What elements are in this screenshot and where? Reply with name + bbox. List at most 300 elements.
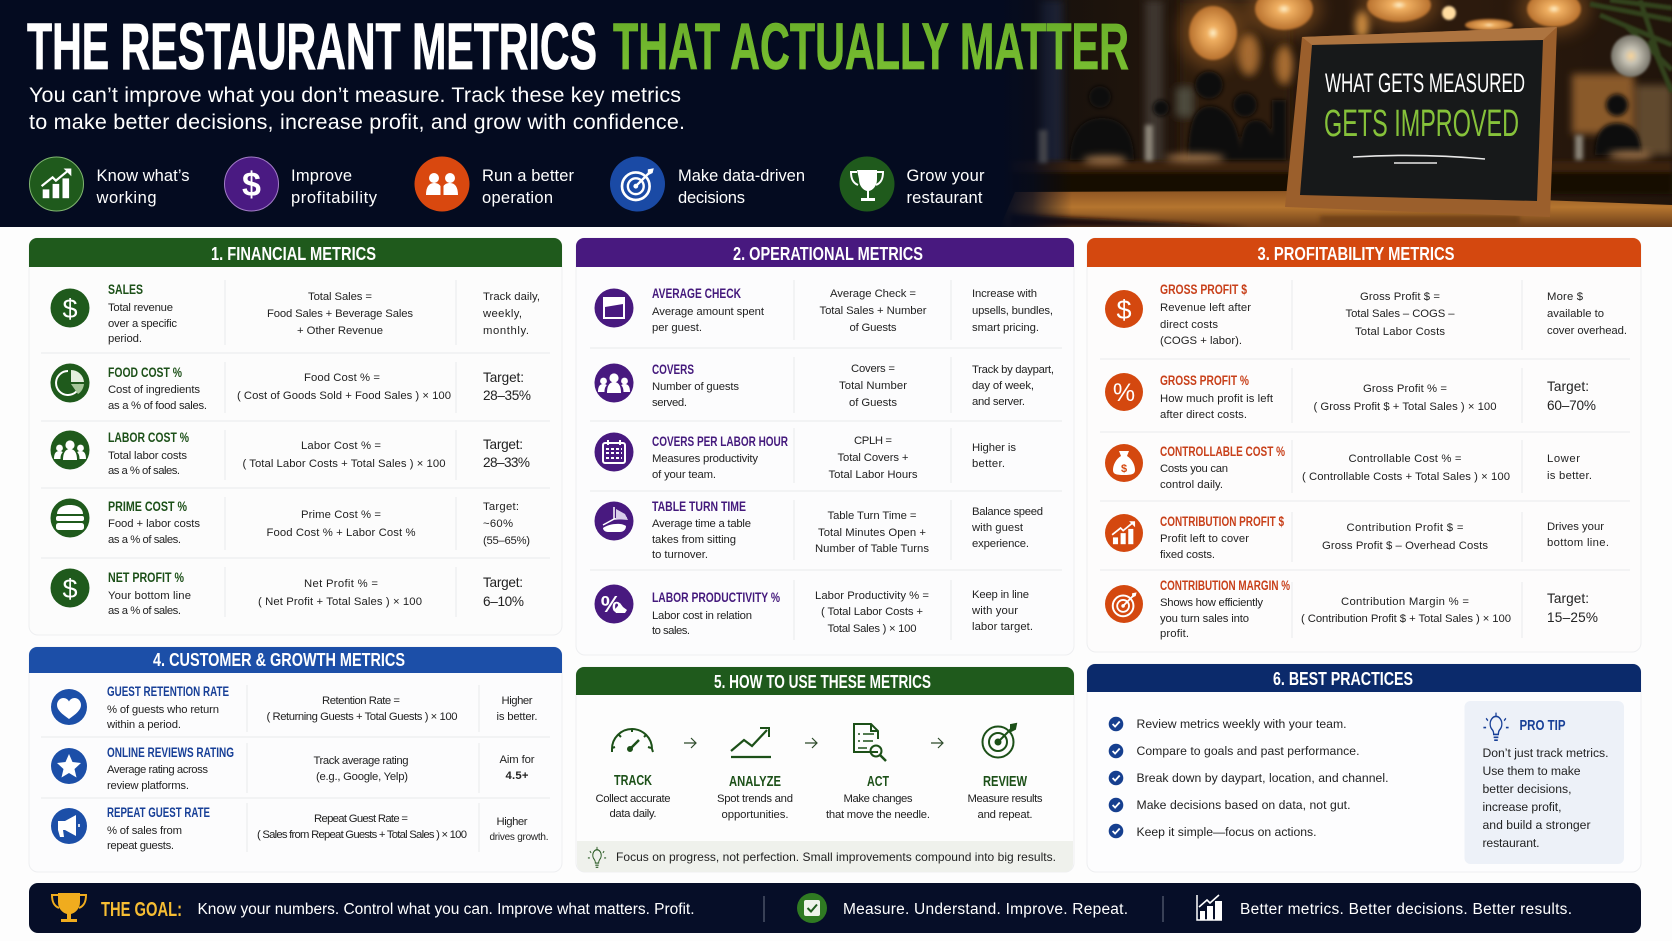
- pro tip text: Use them to make: [1482, 764, 1581, 778]
- navy background: [0, 0, 1000, 227]
- covers definition: served.: [652, 397, 687, 409]
- icon: trend line: [731, 728, 771, 757]
- heading: how to use these metrics: 5. HOW TO USE THESE METRICS: [714, 671, 931, 692]
- average check guidance: upsells, bundles,: [972, 305, 1053, 317]
- counter: [1010, 161, 1672, 194]
- prime cost definition: [108, 499, 200, 546]
- guest retention formula: Retention Rate =: [322, 695, 400, 707]
- covers guidance: day of week,: [972, 380, 1034, 392]
- arrow: [805, 738, 817, 748]
- heading: financial metrics: [29, 238, 562, 267]
- covers guidance: [972, 364, 1054, 408]
- sales formula: [267, 291, 413, 337]
- metric: sales: [50, 282, 540, 345]
- benefit: know what's working: Know what’s: [96, 167, 190, 185]
- prime cost definition: PRIME COST %: [108, 499, 187, 514]
- labor cost formula: Labor Cost % =: [301, 440, 381, 452]
- contribution profit guidance: [1547, 521, 1609, 549]
- table turn time formula: [815, 510, 929, 555]
- contribution margin target: Target:: [1547, 591, 1589, 606]
- benefit: run a better operation: Run a better: [482, 167, 574, 185]
- icon: dollar: [50, 288, 90, 328]
- food cost definition: [108, 365, 207, 412]
- gross profit dollars definition: (COGS + labor).: [1160, 335, 1242, 347]
- repeat guest guidance: Higher: [496, 816, 528, 828]
- food cost formula: ( Cost of Goods Sold + Food Sales ) × 100: [237, 390, 451, 402]
- panel 1: financial metrics: [29, 238, 562, 635]
- track label: TRACK: [614, 773, 652, 789]
- average check guidance: [972, 288, 1053, 334]
- labor productivity definition: [652, 590, 780, 637]
- lamp glow: [1179, 0, 1590, 69]
- covers formula: of Guests: [849, 397, 897, 409]
- table turn time definition: to turnover.: [652, 549, 708, 561]
- contribution profit definition: fixed costs.: [1160, 549, 1215, 561]
- metric: average check: [594, 286, 1053, 334]
- benefit: grow your restaurant: Grow your: [906, 167, 985, 185]
- controllable cost definition: control daily.: [1160, 479, 1223, 491]
- pro tip text: and build a stronger: [1482, 818, 1590, 832]
- sales formula: + Other Revenue: [297, 325, 383, 337]
- benefit: grow your restaurant: restaurant: [906, 189, 983, 207]
- net profit formula: ( Net Profit + Total Sales ) × 100: [258, 596, 422, 608]
- labor productivity formula: Labor Productivity % =: [815, 590, 929, 602]
- checklist: Break down by daypart, location, and channel.: [1136, 771, 1388, 785]
- icon: dollar: $: [62, 294, 78, 324]
- labor productivity guidance: Keep in line: [972, 589, 1029, 601]
- gross profit percent target: 60–70%: [1547, 398, 1596, 413]
- prime cost target: [483, 501, 530, 547]
- icon: target: [982, 724, 1016, 758]
- arrow: [931, 738, 943, 748]
- step: review: [968, 724, 1043, 821]
- table turn time formula: Table Turn Time =: [828, 510, 917, 522]
- heading: best practices: [1087, 664, 1641, 692]
- review label: Measure results: [968, 793, 1043, 805]
- icon: percent person: %: [601, 591, 621, 617]
- hero banner: [0, 0, 1672, 227]
- labor productivity definition: to sales.: [652, 625, 690, 637]
- contribution profit definition: Profit left to cover: [1160, 533, 1249, 545]
- better slogan: Better metrics. Better decisions. Better results.: [1240, 901, 1572, 918]
- gross profit percent definition: after direct costs.: [1160, 409, 1247, 421]
- benefit: run a better operation: [414, 156, 574, 212]
- table turn time definition: TABLE TURN TIME: [652, 499, 746, 514]
- metric: net profit: [50, 568, 524, 617]
- sales definition: SALES: [108, 282, 143, 297]
- covers formula: Covers =: [851, 363, 895, 375]
- net profit definition: NET PROFIT %: [108, 570, 184, 585]
- icon: calendar: [594, 432, 634, 472]
- average check formula: of Guests: [850, 322, 897, 334]
- gross profit dollars formula: [1346, 291, 1455, 338]
- labor cost formula: ( Total Labor Costs + Total Sales ) × 100: [242, 458, 446, 470]
- icon: pie chart: [50, 364, 90, 402]
- repeat guest formula: Repeat Guest Rate =: [314, 813, 408, 825]
- guest retention guidance: [496, 695, 538, 723]
- net profit definition: [108, 570, 191, 617]
- sales definition: period.: [108, 333, 142, 345]
- controllable cost guidance: [1547, 453, 1592, 482]
- title: THAT ACTUALLY MATTER: [613, 9, 1129, 83]
- metric: food cost: [50, 364, 531, 412]
- analyze label: ANALYZE: [729, 774, 781, 790]
- online reviews definition: review platforms.: [107, 780, 189, 792]
- contribution margin target: [1547, 591, 1598, 625]
- table turn time definition: [652, 499, 751, 561]
- heading: operational metrics: [576, 238, 1074, 267]
- average check guidance: smart pricing.: [972, 322, 1039, 334]
- covers definition: Number of guests: [652, 381, 739, 393]
- metric: contribution profit: [1105, 514, 1609, 561]
- table turn time formula: Total Minutes Open +: [818, 527, 926, 539]
- icon: star: [51, 748, 87, 784]
- food cost definition: Cost of ingredients: [108, 384, 200, 396]
- net profit formula: Net Profit % =: [304, 578, 378, 590]
- sales formula: Total Sales =: [308, 291, 372, 303]
- heading: best practices: 6. BEST PRACTICES: [1273, 668, 1413, 689]
- arrow: [684, 738, 696, 748]
- panel 5: how to use these metrics: [576, 667, 1074, 872]
- checklist: Keep it simple—focus on actions.: [1136, 825, 1316, 839]
- pro tip heading: PRO TIP: [1520, 717, 1566, 734]
- covers per labor hour formula: Total Covers +: [838, 452, 909, 464]
- controllable cost guidance: Lower: [1547, 453, 1580, 465]
- sales definition: [108, 282, 177, 345]
- icon: stacked layers: [50, 498, 90, 538]
- food cost target: 28–35%: [483, 388, 531, 403]
- step: track: [596, 729, 670, 820]
- guest retention definition: GUEST RETENTION RATE: [107, 684, 229, 699]
- repeat guest definition: REPEAT GUEST RATE: [107, 805, 210, 820]
- contribution margin definition: CONTRIBUTION MARGIN %: [1160, 578, 1290, 593]
- subtitle: [29, 83, 685, 134]
- controllable cost formula: Controllable Cost % =: [1348, 453, 1462, 465]
- heading: financial metrics: 1. FINANCIAL METRICS: [211, 243, 376, 264]
- average check formula: Average Check =: [830, 288, 916, 300]
- metric: repeat guest rate: [51, 805, 548, 852]
- act label: [826, 774, 930, 821]
- metric: gross profit dollars: [1105, 282, 1627, 347]
- prime cost definition: Food + labor costs: [108, 518, 200, 530]
- contribution margin definition: you turn sales into: [1160, 613, 1249, 625]
- review label: REVIEW: [983, 774, 1027, 790]
- online reviews definition: ONLINE REVIEWS RATING: [107, 745, 234, 760]
- gross profit percent target: Target:: [1547, 379, 1589, 394]
- net profit target: [483, 575, 524, 609]
- metric: contribution margin: [1105, 578, 1598, 640]
- metric: prime cost: [50, 498, 530, 547]
- table turn time definition: takes from sitting: [652, 534, 736, 546]
- benefit: make data-driven decisions: decisions: [678, 189, 745, 207]
- covers formula: Total Number: [839, 380, 907, 392]
- gross profit percent definition: GROSS PROFIT %: [1160, 373, 1249, 388]
- contribution profit guidance: bottom line.: [1547, 537, 1609, 549]
- covers per labor hour definition: COVERS PER LABOR HOUR: [652, 434, 788, 449]
- controllable cost definition: Costs you can: [1160, 463, 1228, 475]
- icon: dollar: [1105, 290, 1143, 328]
- metric: labor cost: [50, 430, 530, 477]
- gross profit dollars definition: GROSS PROFIT $: [1160, 282, 1247, 297]
- average check definition: Average amount spent: [652, 306, 765, 318]
- table turn time guidance: experience.: [972, 538, 1029, 550]
- covers definition: COVERS: [652, 362, 694, 377]
- sign text: what gets measured: WHAT GETS MEASURED: [1325, 68, 1525, 98]
- food cost definition: as a % of food sales.: [108, 400, 207, 412]
- track label: [596, 773, 670, 820]
- net profit formula: [258, 578, 422, 608]
- food cost target: Target:: [483, 370, 524, 385]
- benefit: make data-driven decisions: [610, 156, 805, 212]
- measure slogan: Measure. Understand. Improve. Repeat.: [843, 901, 1128, 918]
- icon: document with magnifier: [854, 724, 886, 761]
- repeat guest definition: repeat guests.: [107, 840, 174, 852]
- sales definition: over a specific: [108, 318, 177, 330]
- labor productivity guidance: labor target.: [972, 621, 1033, 633]
- track label: Collect accurate: [596, 793, 670, 805]
- guest retention definition: within a period.: [106, 719, 181, 731]
- average check formula: [820, 288, 927, 334]
- benefit: improve profitability: Improve: [291, 167, 352, 185]
- metric: labor productivity: [594, 584, 1033, 637]
- panel 6: best practices: [1087, 664, 1641, 872]
- gross profit percent formula: [1314, 383, 1496, 413]
- contribution profit formula: [1322, 522, 1488, 552]
- goal bar: [29, 883, 1641, 933]
- covers per labor hour guidance: Higher is: [972, 442, 1016, 454]
- icon: guests: [594, 364, 634, 402]
- benefit: know what's working: [30, 157, 190, 211]
- covers guidance: and server.: [972, 396, 1025, 408]
- online reviews definition: [107, 745, 234, 792]
- chalkboard sign: [1285, 27, 1557, 217]
- chalk underline: [1353, 155, 1485, 159]
- labor cost definition: LABOR COST %: [108, 430, 189, 445]
- covers per labor hour guidance: better.: [972, 458, 1005, 470]
- covers per labor hour formula: Total Labor Hours: [828, 469, 918, 481]
- icon: trophy: [52, 893, 86, 922]
- review label: and repeat.: [978, 809, 1032, 821]
- contribution margin formula: [1301, 596, 1511, 625]
- labor productivity definition: Labor cost in relation: [652, 610, 752, 622]
- gross profit dollars formula: Gross Profit $ =: [1360, 291, 1440, 303]
- contribution profit formula: Gross Profit $ – Overhead Costs: [1322, 540, 1488, 552]
- food cost formula: Food Cost % =: [304, 372, 380, 384]
- checklist: Compare to goals and past performance.: [1136, 744, 1360, 758]
- food cost definition: FOOD COST %: [108, 365, 182, 380]
- gross profit dollars definition: Revenue left after: [1160, 302, 1251, 314]
- labor productivity guidance: with your: [971, 605, 1018, 617]
- icon: percent person: [594, 584, 634, 624]
- guest retention definition: [106, 684, 229, 731]
- repeat guest definition: [107, 805, 210, 852]
- benefit: improve profitability: [224, 157, 378, 211]
- labor cost target: [483, 437, 530, 470]
- sales formula: Food Sales + Beverage Sales: [267, 308, 413, 320]
- online reviews guidance: 4.5+: [506, 770, 529, 782]
- covers guidance: Track by daypart,: [972, 364, 1054, 376]
- icon: light bulb: [1483, 713, 1509, 740]
- icon: target: [1105, 585, 1143, 623]
- contribution margin definition: profit.: [1160, 628, 1189, 640]
- act label: ACT: [867, 774, 889, 790]
- step: analyze: [717, 728, 793, 821]
- pro tip card: [1464, 701, 1624, 864]
- gross profit dollars formula: Total Sales – COGS –: [1346, 308, 1455, 320]
- labor productivity definition: LABOR PRODUCTIVITY %: [652, 590, 780, 605]
- benefit: know what's working: working: [96, 189, 156, 207]
- plant: [1590, 0, 1672, 92]
- sales guidance: weekly,: [482, 308, 522, 320]
- average check definition: AVERAGE CHECK: [652, 286, 741, 301]
- heading: profitability metrics: 3. PROFITABILITY METRICS: [1258, 243, 1454, 264]
- covers per labor hour definition: of your team.: [652, 469, 716, 481]
- benefit: make data-driven decisions: Make data-driven: [678, 167, 805, 185]
- icon: clock table: [594, 502, 634, 540]
- labor productivity formula: [815, 590, 929, 635]
- contribution profit formula: Contribution Profit $ =: [1346, 522, 1464, 534]
- labor cost target: Target:: [483, 437, 523, 452]
- photo: restaurant interior: [1000, 0, 1672, 227]
- pro tip text: restaurant.: [1482, 836, 1540, 850]
- repeat guest definition: % of sales from: [107, 825, 182, 837]
- table turn time guidance: with guest: [971, 522, 1024, 534]
- table turn time guidance: Balance speed: [972, 506, 1043, 518]
- icon: money bag: $: [1121, 463, 1127, 475]
- icon: green check: [797, 893, 827, 923]
- contribution margin definition: Shows how efficiently: [1160, 597, 1263, 609]
- blurred guests: [1070, 71, 1641, 160]
- controllable cost definition: [1160, 444, 1285, 491]
- online reviews formula: [314, 755, 408, 783]
- panel 4: customer and growth metrics: [29, 647, 562, 872]
- goal statement: Know your numbers. Control what you can. Improve what matters. Profit.: [198, 901, 694, 918]
- average check guidance: Increase with: [972, 288, 1037, 300]
- wooden table: [1000, 191, 1672, 227]
- gross profit dollars guidance: More $: [1547, 291, 1584, 303]
- pro tip text: Don’t just track metrics.: [1482, 746, 1608, 760]
- table turn time formula: Number of Table Turns: [815, 543, 929, 555]
- guest retention guidance: is better.: [496, 711, 538, 723]
- repeat guest formula: ( Sales from Repeat Guests + Total Sales ) × 100: [257, 829, 467, 841]
- checklist: [1109, 717, 1388, 839]
- gross profit percent formula: ( Gross Profit $ + Total Sales ) × 100: [1314, 401, 1496, 413]
- food cost target: [483, 370, 531, 403]
- controllable cost formula: [1302, 453, 1510, 483]
- online reviews formula: (e.g., Google, Yelp): [316, 771, 408, 783]
- contribution profit guidance: Drives your: [1547, 521, 1604, 533]
- sales guidance: Track daily,: [483, 291, 540, 303]
- labor productivity guidance: [971, 589, 1033, 633]
- subtitle: to make better decisions, increase profit, and grow with confidence.: [29, 110, 685, 134]
- icon: check window: [594, 288, 634, 328]
- covers definition: [652, 362, 739, 409]
- heading: customer and growth metrics: 4. CUSTOMER & GROWTH METRICS: [153, 649, 405, 670]
- goal label: THE GOAL:: [101, 899, 182, 921]
- guest retention definition: % of guests who return: [107, 704, 219, 716]
- gross profit dollars guidance: cover overhead.: [1547, 325, 1627, 337]
- labor cost definition: as a % of sales.: [108, 465, 180, 477]
- metric: covers per labor hour: [594, 432, 1016, 481]
- gross profit percent definition: [1160, 373, 1274, 421]
- covers per labor hour definition: [652, 434, 788, 481]
- repeat guest guidance: [490, 816, 548, 843]
- labor cost target: 28–33%: [483, 455, 530, 470]
- labor cost formula: [242, 440, 446, 470]
- sign text: gets improved: GETS IMPROVED: [1324, 103, 1519, 145]
- analyze label: Spot trends and: [717, 793, 793, 805]
- contribution margin definition: [1160, 578, 1290, 640]
- prime cost target: (55–65%): [483, 535, 530, 547]
- sales definition: Total revenue: [108, 302, 173, 314]
- net profit target: 6–10%: [483, 594, 524, 609]
- icon: bar chart: [1197, 895, 1222, 920]
- icon: dollar: [50, 568, 90, 608]
- food cost formula: [237, 372, 451, 402]
- checklist: Review metrics weekly with your team.: [1136, 717, 1346, 731]
- gross profit dollars definition: [1160, 282, 1251, 347]
- review label: [968, 774, 1043, 821]
- online reviews guidance: [500, 754, 535, 782]
- controllable cost guidance: is better.: [1547, 470, 1592, 482]
- table turn time definition: Average time a table: [652, 518, 751, 530]
- online reviews definition: Average rating across: [107, 764, 208, 776]
- average check definition: [652, 286, 765, 334]
- panel 3: profitability metrics: [1087, 238, 1641, 652]
- step: act: [826, 724, 930, 821]
- heading: profitability metrics: [1087, 238, 1641, 267]
- contribution profit definition: CONTRIBUTION PROFIT $: [1160, 514, 1284, 529]
- icon: dollar: $: [1116, 295, 1132, 325]
- icon: money bag: [1105, 444, 1143, 482]
- tip strip: [577, 841, 1073, 872]
- online reviews formula: Track average rating: [314, 755, 408, 767]
- contribution margin target: 15–25%: [1547, 610, 1598, 625]
- controllable cost formula: ( Controllable Costs + Total Sales ) × 100: [1302, 471, 1510, 483]
- benefit: grow your restaurant: [840, 156, 985, 212]
- gross profit percent definition: How much profit is left: [1160, 393, 1274, 405]
- fade from navy to photo: [1000, 0, 1072, 227]
- contribution margin formula: Contribution Margin % =: [1341, 596, 1469, 608]
- prime cost formula: Prime Cost % =: [301, 509, 381, 521]
- covers per labor hour formula: CPLH =: [854, 435, 892, 447]
- average check definition: per guest.: [652, 322, 702, 334]
- average check formula: Total Sales + Number: [820, 305, 927, 317]
- gross profit dollars definition: direct costs: [1160, 319, 1218, 331]
- icon: dollar: $: [62, 574, 78, 604]
- covers per labor hour formula: [828, 435, 918, 481]
- benefit: run a better operation: operation: [482, 189, 553, 207]
- subtitle: You can’t improve what you don’t measure. Track these key metrics: [29, 83, 681, 107]
- icon: heart: [51, 689, 87, 725]
- contribution profit definition: [1160, 514, 1284, 561]
- track label: data daily.: [610, 808, 656, 820]
- covers formula: [839, 363, 907, 409]
- labor cost definition: Total labor costs: [108, 450, 187, 462]
- gross profit percent target: [1547, 379, 1596, 413]
- icon: megaphone: [51, 808, 87, 844]
- checklist: Make decisions based on data, not gut.: [1136, 798, 1350, 812]
- pro tip text: [1482, 746, 1608, 850]
- net profit definition: Your bottom line: [108, 590, 191, 602]
- covers per labor hour definition: Measures productivity: [652, 453, 758, 465]
- icon: growth chart: [1105, 514, 1143, 552]
- prime cost formula: [266, 509, 416, 539]
- labor productivity formula: ( Total Labor Costs +: [821, 606, 923, 618]
- title: THE RESTAURANT METRICS: [27, 9, 597, 83]
- analyze label: opportunities.: [722, 809, 788, 821]
- metric: gross profit percent: [1105, 373, 1596, 421]
